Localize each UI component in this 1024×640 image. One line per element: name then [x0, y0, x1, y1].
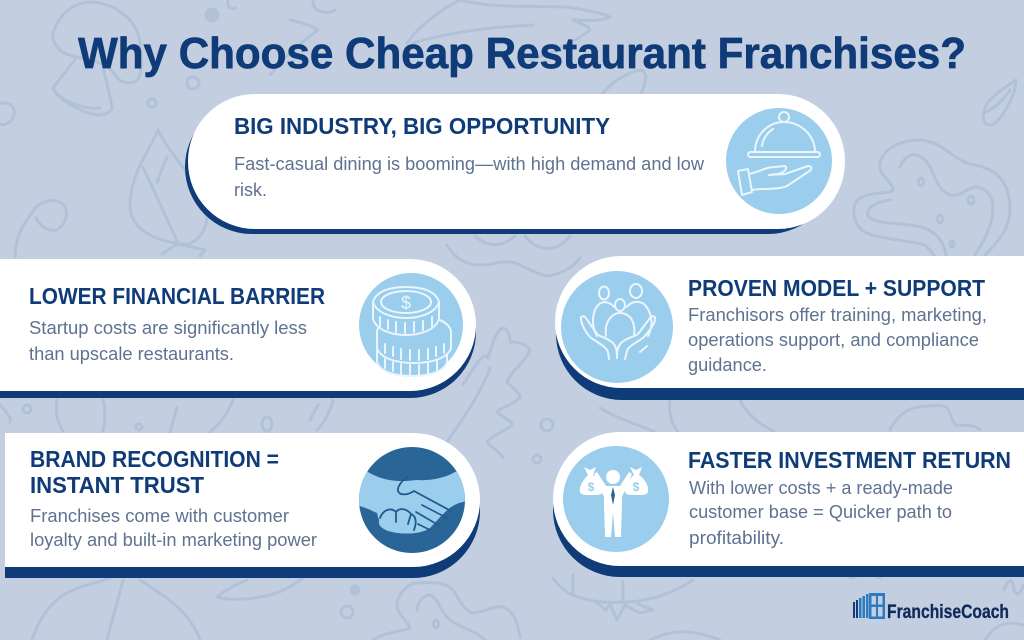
heading: proven model: PROVEN MODEL + SUPPORT — [688, 275, 985, 301]
heading: brand recognition — [30, 446, 279, 498]
panel: brand recognition — [5, 433, 480, 578]
icon: family in hands — [561, 271, 673, 383]
text: big industry: risk. — [234, 180, 267, 200]
text: faster investment return: With lower costs + a ready-made — [689, 478, 953, 498]
text: proven model: operations support, and compliance — [688, 330, 979, 350]
text: proven model — [688, 305, 987, 375]
logo: FranchiseCoach — [853, 593, 1009, 623]
icon: handshake — [355, 447, 470, 553]
text: brand recognition — [30, 506, 317, 550]
text: lower financial barrier: than upscale restaurants. — [29, 344, 234, 364]
icon: man with money bags: $ — [633, 480, 640, 494]
card body — [188, 94, 845, 229]
heading: big industry: BIG INDUSTRY, BIG OPPORTUNITY — [234, 113, 610, 139]
heading: lower financial barrier: LOWER FINANCIAL BARRIER — [29, 283, 325, 309]
heading: brand recognition: BRAND RECOGNITION = — [30, 446, 279, 472]
text: big industry — [234, 154, 705, 200]
text: faster investment return: profitability. — [689, 528, 784, 548]
card body — [0, 259, 476, 391]
card body — [553, 432, 1024, 566]
heading: brand recognition: INSTANT TRUST — [30, 472, 204, 498]
card shadow — [5, 443, 480, 578]
card shadow — [185, 100, 835, 234]
dollar signs: $ — [588, 480, 595, 494]
text: brand recognition: Franchises come with customer — [30, 506, 289, 526]
panel: proven model — [555, 256, 1024, 400]
logo window mark — [853, 593, 885, 619]
icon: man with money bags — [563, 446, 669, 552]
text: faster investment return: customer base = Quicker path to — [689, 502, 952, 522]
text: proven model: Franchisors offer training, marketing, — [688, 305, 987, 325]
text: brand recognition: loyalty and built-in marketing power — [30, 530, 317, 550]
dollar sign: $ — [401, 293, 411, 313]
text: big industry: Fast-casual dining is booming—with high demand and low — [234, 154, 705, 174]
text: lower financial barrier — [29, 318, 307, 364]
icon: coin stack — [359, 273, 463, 377]
panel: faster investment return — [553, 432, 1024, 577]
card shadow — [0, 266, 476, 398]
text: lower financial barrier: Startup costs are significantly less — [29, 318, 307, 338]
title: Why Choose Cheap Restaurant Franchises? — [78, 29, 966, 78]
panel: big industry — [185, 94, 845, 234]
card shadow — [556, 268, 1024, 400]
icon: serving cloche and hand — [726, 108, 832, 214]
panel: lower financial barrier — [0, 259, 476, 398]
card shadow — [553, 443, 1024, 577]
text: proven model: guidance. — [688, 355, 767, 375]
card body — [555, 256, 1024, 388]
text: faster investment return — [689, 478, 953, 548]
card body — [5, 433, 480, 567]
